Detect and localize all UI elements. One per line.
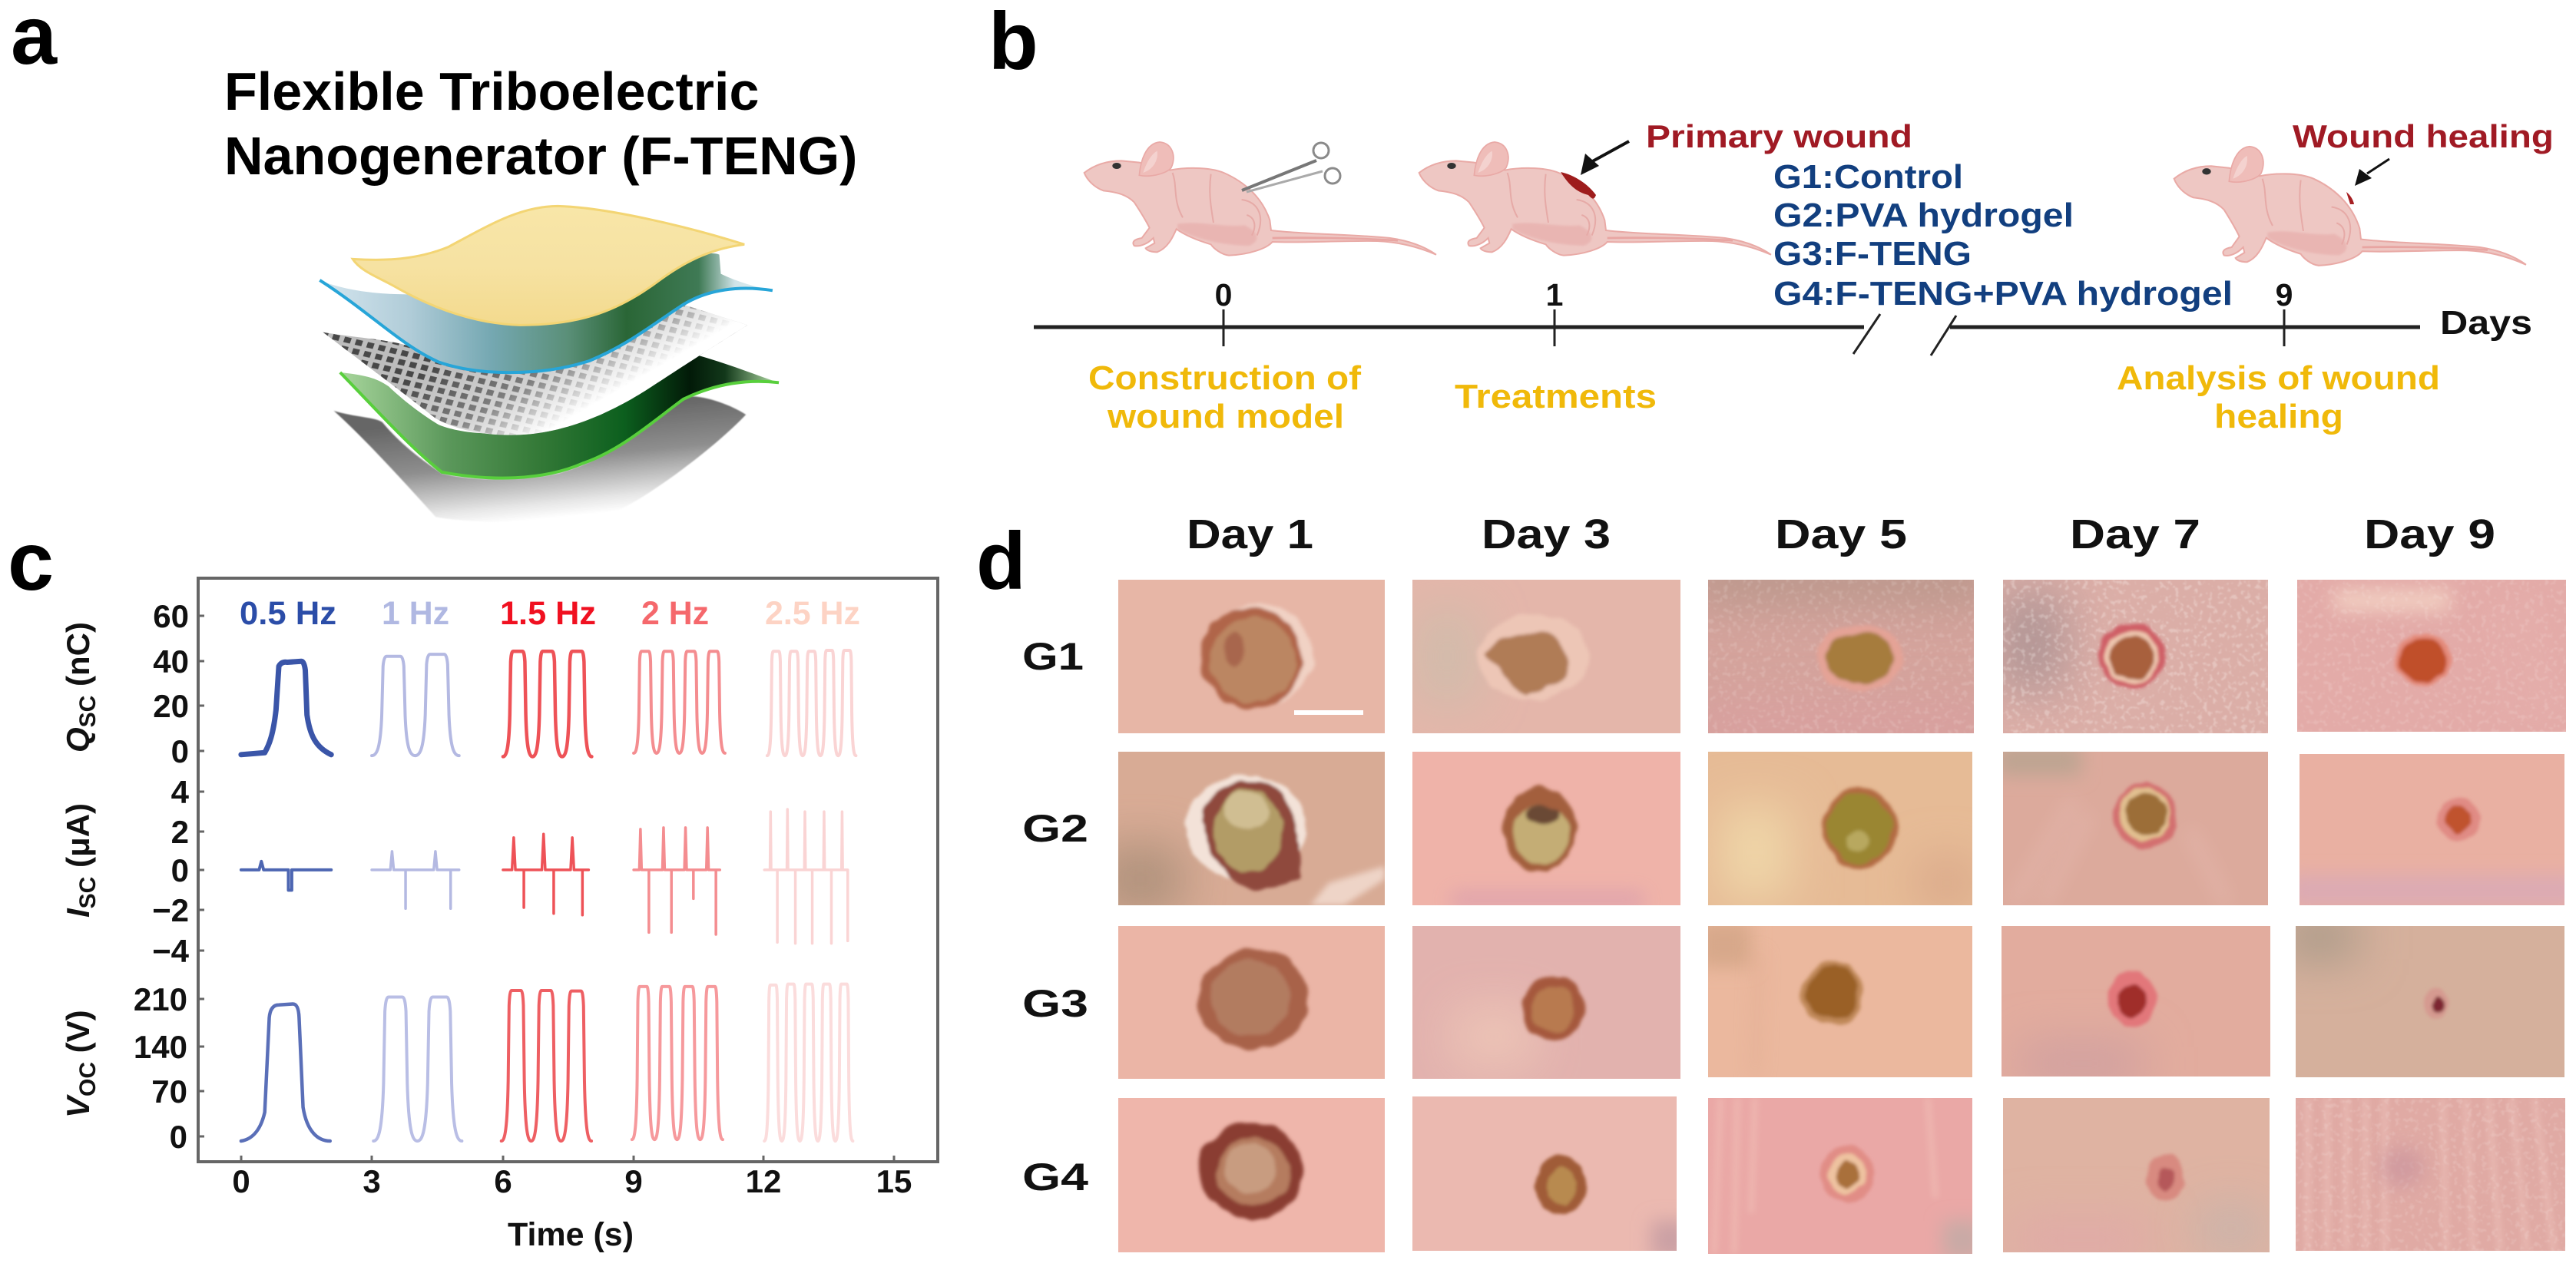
row headers: G3 [1022,982,1088,1025]
step label: analysis: Analysis of wound [2117,359,2440,397]
step label: analysis [2117,359,2440,435]
x tick labels [232,1163,912,1199]
y axis title: Qsc: Q [60,727,97,752]
y tick labels: 0 [171,733,189,769]
y tick labels: 2 [171,814,189,850]
column headers: Day 3 [1482,511,1611,557]
y tick labels: 70 [151,1073,187,1110]
title: Flexible Triboelectric [224,61,759,121]
panel c: electrical output chart [8,514,938,1253]
traces: open-circuit voltage [241,984,853,1141]
x tick labels: 9 [624,1163,643,1199]
traces: short-circuit charge [241,650,856,756]
photo: G3 Day 9 [2296,926,2564,1077]
y axis title: Isc: (μA) [60,803,96,877]
treatment groups list: G4:F-TENG+PVA hydrogel [1773,275,2233,313]
y tick labels: 140 [134,1029,187,1065]
y axis title: Isc: I [60,908,96,918]
photo: G1 Day 7 [2003,580,2268,733]
column headers: Day 5 [1775,511,1907,557]
photo: G3 Day 5 [1708,926,1972,1077]
step label: construction [1088,359,1361,435]
y axis title: Qsc: (nC) [60,622,96,696]
layer: green electrode [340,353,779,478]
x tick labels: 6 [494,1163,512,1199]
photo: G3 Day 1 [1118,926,1385,1079]
row headers: G1 [1022,635,1084,678]
y tick labels [134,598,190,1155]
y tick labels: 210 [134,981,187,1017]
arrow: wound healing [2355,159,2389,186]
photo: G3 Day 7 [2002,926,2270,1077]
photo: G1 Day 1 [1118,580,1385,733]
panel d: wound photo grid [976,511,2576,1259]
y axis title: Voc: OC [75,1062,101,1096]
timeline day numbers: 0 [1215,277,1232,313]
y tick labels: 0 [171,852,189,888]
axis unit: days: Days [2440,304,2532,342]
frequency labels: 1 Hz [382,595,449,632]
y tick labels: 60 [153,598,189,634]
photo: G4 Day 1 [1118,1098,1385,1252]
layer: blue-green electrode [320,253,773,372]
y tick labels: 4 [171,774,190,810]
column headers: Day 7 [2070,511,2200,557]
panel letter d: d [976,516,1026,607]
layer: micro-patterned film [323,305,747,435]
x axis title: Time (s) [508,1216,634,1253]
timeline day numbers [1215,277,2293,313]
timeline day numbers: 1 [1546,277,1563,313]
y tick labels: −2 [152,892,189,928]
arrow: primary wound [1581,141,1629,175]
treatment groups list: G3:F-TENG [1773,235,1972,273]
layer: yellow top film [353,206,744,325]
timeline day numbers: 9 [2276,277,2293,313]
frequency labels [240,595,860,632]
y tick labels: 0 [170,1119,187,1155]
photo: G1 Day 9 [2297,580,2566,732]
photo: G2 Day 1 [1118,752,1385,905]
mouse: day 1 with primary wound [1419,142,1771,256]
photo: G4 Day 7 [2003,1098,2270,1252]
x tick labels: 15 [876,1163,912,1199]
photo: G4 Day 3 [1412,1096,1677,1251]
treatment groups list: G1:Control [1773,158,1963,196]
step label: construction: Construction of [1088,359,1361,397]
treatment groups list: G2:PVA hydrogel [1773,197,2074,234]
photo: G1 Day 5 [1708,580,1974,733]
chart frame and ticks [198,578,938,1162]
row headers [1022,635,1088,1199]
y tick labels: 20 [153,688,189,724]
timeline axis [1034,309,2420,356]
step label: treatments: Treatments [1455,378,1657,415]
layer: grey substrate [334,396,746,522]
mouse: day 9 with healing wound [2174,147,2526,266]
photo: G2 Day 9 [2300,754,2564,905]
frequency labels: 1.5 Hz [500,595,596,632]
label: wound healing: Wound healing [2293,118,2554,154]
photo: G3 Day 3 [1412,926,1680,1079]
x tick labels: 0 [232,1163,250,1199]
column headers: Day 9 [2364,511,2495,557]
step label: construction: wound model [1107,398,1344,435]
photo: G2 Day 3 [1412,752,1680,905]
photo: G1 Day 3 [1412,580,1680,733]
frequency labels: 0.5 Hz [240,595,336,632]
y axis title: Qsc: SC [75,696,101,727]
healing wound patch [2346,192,2354,204]
y tick labels: −4 [152,933,190,969]
title: Nanogenerator (F-TENG) [224,126,857,186]
panel a: F-TENG [11,0,857,522]
column headers [1187,511,2495,557]
wound patch [1561,172,1596,199]
photo: G2 Day 5 [1708,752,1972,905]
x tick labels: 12 [746,1163,781,1199]
x tick labels: 3 [363,1163,381,1199]
icon: flexible layered stack [320,206,779,522]
y axis title: Isc: SC [75,877,101,908]
y tick labels: 40 [153,643,189,680]
frequency labels: 2.5 Hz [765,595,860,632]
row headers: G4 [1022,1156,1088,1199]
y axis title: Voc: V [60,1094,96,1118]
icon: scissors [1242,143,1340,192]
column headers: Day 1 [1187,511,1313,557]
photo: G4 Day 5 [1708,1098,1972,1254]
treatment groups list [1773,158,2233,313]
panel letter c: c [8,514,54,607]
y axis title: Voc: (V) [60,1010,96,1062]
photo: G4 Day 9 [2296,1098,2565,1251]
label: primary wound: Primary wound [1646,118,1912,154]
mouse: day 0 with scissors [1084,142,1436,256]
step label: analysis: healing [2214,398,2343,435]
frequency labels: 2 Hz [641,595,709,632]
row headers: G2 [1022,807,1088,850]
panel b: experimental timeline [988,0,2554,435]
traces: short-circuit current [241,809,848,944]
photo: G2 Day 7 [2003,752,2268,905]
